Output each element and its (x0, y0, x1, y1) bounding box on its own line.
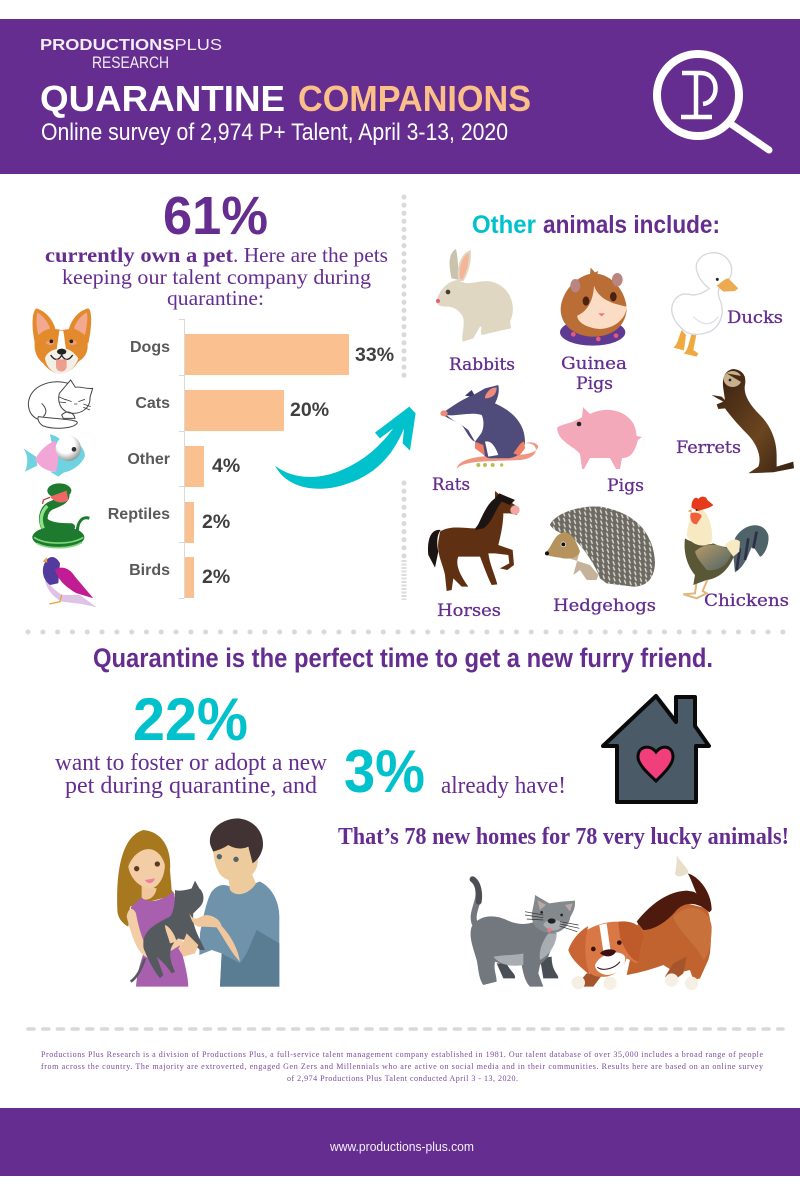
heading: other animals: Other (472, 211, 536, 239)
bar chart: pets owned: Reptiles (108, 506, 170, 523)
stat: 61 percent own a pet (45, 186, 388, 310)
icon: corgi (33, 308, 91, 373)
animal: guinea pig (560, 268, 627, 346)
heading: furry friend: Quarantine is the perfect time to get a new furry friend. (93, 643, 713, 673)
label: Ducks (727, 308, 783, 328)
label: Ferrets (676, 438, 741, 458)
foster text (55, 750, 328, 799)
pet ownership text: quarantine: (167, 286, 264, 310)
animal: hedgehog (545, 506, 655, 587)
vertical dotted divider (402, 197, 406, 600)
header banner (0, 19, 800, 174)
logo wordmark: PRODUCTIONS PLUS (40, 37, 222, 54)
stat: 61 percent own a pet: 61% (163, 186, 268, 246)
label: Hedgehogs (553, 596, 656, 616)
label: Chickens (704, 591, 789, 611)
label: Rabbits (449, 355, 515, 375)
heading: other animals: animals include: (543, 211, 720, 239)
heading: other animals (472, 211, 720, 239)
bar chart: pets owned: 2% (202, 566, 230, 588)
bar chart: pets owned: Other (127, 451, 170, 468)
bar chart: pets owned: 2% (202, 511, 230, 533)
website: www.productions-plus.com (329, 1139, 474, 1154)
foster text: pet during quarantine, and (65, 773, 317, 799)
stat: 22 percent: 22% (133, 686, 248, 753)
footer banner (0, 1108, 800, 1176)
illustration: couple with cat (117, 818, 279, 987)
animal: duck (672, 253, 738, 357)
title: COMPANIONS (298, 78, 531, 119)
title (40, 78, 531, 119)
pet ownership text: keeping our talent company during (62, 265, 372, 289)
animal: rabbit (436, 249, 513, 342)
bar chart: pets owned (108, 319, 394, 598)
animal: horse (428, 491, 520, 591)
stat: 3 percent: 3% (344, 738, 425, 805)
label: Rats (432, 475, 470, 495)
icon: magnifying glass logo (657, 54, 769, 150)
pet ownership text: currently own a pet (45, 243, 233, 267)
methodology note: Productions Plus Research is a division of Productions Plus, a full-service talent management company established in 1981. Our talent database of over 35,000 includes a broad range of people (41, 1050, 763, 1059)
label: Pigs (576, 374, 613, 394)
subtitle: Online survey of 2,974 P+ Talent, April 3-13, 2020 (41, 119, 508, 146)
animal: ferret (712, 369, 794, 473)
label: Horses (437, 601, 501, 621)
icon: fish (23, 434, 85, 477)
label: Guinea (561, 354, 627, 374)
animal: pig (557, 407, 642, 469)
icon: snake (32, 483, 89, 548)
animal: rat (440, 385, 538, 469)
logo wordmark: RESEARCH (92, 53, 169, 72)
dotted divider (28, 630, 783, 634)
bar chart: pets owned: Birds (129, 562, 170, 579)
arrow to other animals (275, 407, 416, 489)
pet ownership text (45, 243, 388, 310)
logo wordmark (40, 37, 222, 72)
illustration: cat and dog (471, 855, 712, 990)
icon: cat (28, 380, 93, 428)
foster text: want to foster or adopt a new (55, 750, 328, 776)
title: QUARANTINE (40, 78, 285, 119)
bar chart: pets owned: 20% (290, 399, 329, 421)
methodology note (41, 1050, 763, 1083)
bar chart: pets owned: Cats (135, 395, 170, 412)
methodology note: of 2,974 Productions Plus Talent conducted April 3 - 13, 2020. (287, 1074, 518, 1083)
icon: house with heart (603, 696, 709, 802)
dotted divider (28, 1027, 783, 1031)
pet ownership text: . Here are the pets (233, 243, 388, 267)
bar chart: pets owned: 33% (355, 344, 394, 366)
methodology note: from across the country. The majority are extroverted, engaged Gen Zers and Millennials who are active on social media and in their communities. Results here are based on an online survey (41, 1062, 763, 1071)
already have text: already have! (441, 773, 566, 799)
bar chart: pets owned: 4% (212, 455, 240, 477)
label: Pigs (607, 476, 644, 496)
icon: bird (43, 557, 97, 607)
bar chart: pets owned: Dogs (130, 339, 170, 356)
animal: rooster (683, 497, 769, 598)
